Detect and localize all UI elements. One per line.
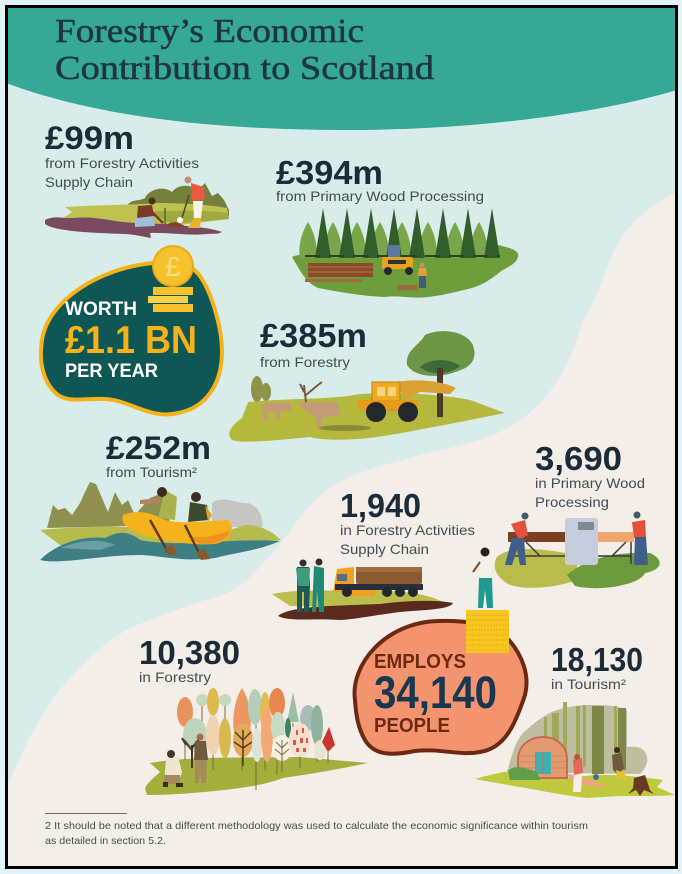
stat: £252m: £252m xyxy=(106,430,211,466)
icon: coin stack xyxy=(148,287,193,312)
icon: coin xyxy=(153,246,193,286)
stat: £394m: £394m xyxy=(276,154,383,191)
stat: £394m xyxy=(276,154,484,204)
stat: 18,130: in Tourism² xyxy=(551,676,626,692)
stat: £385m: £385m xyxy=(260,317,367,354)
illustration: mixed forest with hikers xyxy=(145,688,368,795)
illustration: tree planting xyxy=(45,176,229,238)
stat: 3,690: 3,690 xyxy=(535,440,622,477)
stat: 3,690 xyxy=(535,440,645,510)
illustration: glamping cabin in woods xyxy=(475,702,675,798)
blob xyxy=(41,262,222,414)
stat: £385m xyxy=(260,317,367,370)
stat: £99m: £99m xyxy=(45,120,134,156)
header band xyxy=(6,6,677,130)
illustration: timber truck and inspectors xyxy=(272,558,453,620)
stat: 1,940: Supply Chain xyxy=(340,541,429,557)
stat: £394m: from Primary Wood Processing xyxy=(276,188,484,204)
footnote: as detailed in section 5.2. xyxy=(45,835,166,847)
title: Contribution to Scotland xyxy=(55,50,434,87)
stat: 3,690: in Primary Wood xyxy=(535,475,645,491)
stat: £99m: from Forestry Activities xyxy=(45,155,199,171)
stat: 10,380: in Forestry xyxy=(139,669,211,685)
callout: employs 34,140 people: PEOPLE xyxy=(374,715,450,737)
callout: employs 34,140 people: EMPLOYS xyxy=(374,651,466,673)
callout: employs 34,140 people: 34,140 xyxy=(374,667,497,718)
footnote: 2 It should be noted that a different methodology was used to calculate the economic significance within tourism xyxy=(45,820,588,832)
callout: worth £1.1 BN per year: £1.1 BN xyxy=(65,319,197,362)
stat: 1,940: in Forestry Activities xyxy=(340,522,475,538)
stat: £252m xyxy=(106,430,211,480)
icon: coin: £ xyxy=(165,251,181,282)
callout: worth £1.1 BN per year xyxy=(41,246,222,414)
illustration: woman standing on coin stack xyxy=(466,548,509,653)
illustration: river rafting xyxy=(40,482,281,561)
callout: worth £1.1 BN per year: PER YEAR xyxy=(65,361,158,382)
stat: 1,940: 1,940 xyxy=(340,487,421,524)
stat: 18,130: 18,130 xyxy=(551,641,643,678)
blob xyxy=(355,621,527,754)
title: Forestry’s Economic xyxy=(55,13,364,50)
title xyxy=(55,13,434,87)
illustration: sawmill workers xyxy=(495,512,660,588)
stat: £99m xyxy=(45,120,199,190)
stat: 10,380: 10,380 xyxy=(139,634,240,671)
stat: 18,130 xyxy=(551,641,643,692)
stat: 1,940 xyxy=(340,487,475,557)
stat: £99m: Supply Chain xyxy=(45,174,133,190)
stat: £252m: from Tourism² xyxy=(106,464,197,480)
stat: £385m: from Forestry xyxy=(260,354,350,370)
illustration: forestry machine, deer and tree xyxy=(229,331,505,442)
footnote xyxy=(45,813,588,847)
callout: worth £1.1 BN per year: WORTH xyxy=(65,299,137,320)
illustration: pine forest and log processing xyxy=(292,208,518,298)
stat: 3,690: Processing xyxy=(535,494,609,510)
callout: employs 34,140 people xyxy=(355,621,527,754)
